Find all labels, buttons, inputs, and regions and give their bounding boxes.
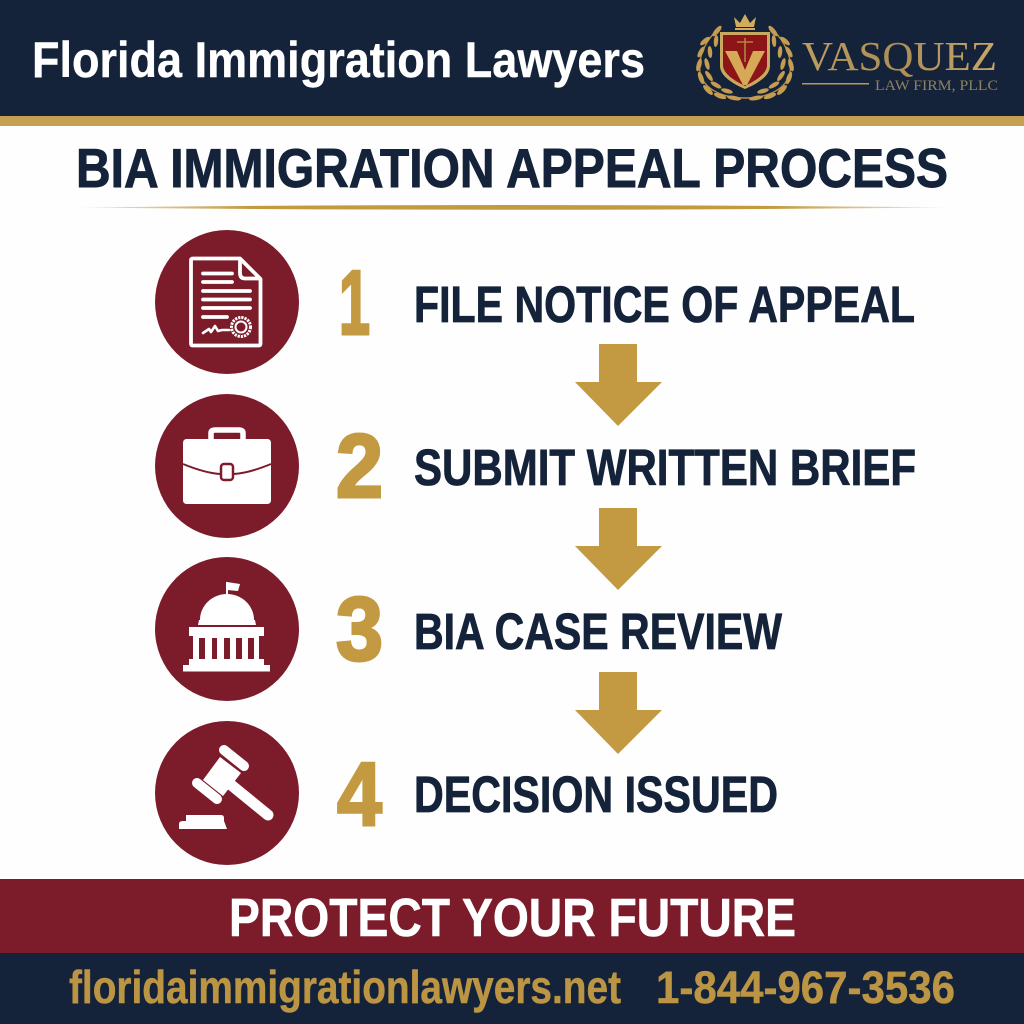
logo subline: LAW FIRM, PLLC [875, 78, 998, 94]
header title: Florida Immigration Lawyers [32, 32, 645, 88]
number 2: 2 [336, 417, 383, 517]
step 4 [155, 721, 778, 865]
step 1 label: FILE NOTICE OF APPEAL [414, 276, 915, 333]
logo shield [720, 32, 770, 89]
contact footer [0, 953, 1024, 1024]
step 3 label: BIA CASE REVIEW [414, 603, 783, 660]
step 2 label: SUBMIT WRITTEN BRIEF [414, 439, 916, 496]
arrow 1 [575, 344, 662, 426]
header band [0, 0, 1024, 126]
number 1: 1 [339, 253, 370, 354]
logo laurel wreath [695, 24, 795, 101]
icon: document [155, 230, 299, 374]
call to action band [0, 879, 1024, 953]
number 3: 3 [336, 580, 383, 680]
phone number: 1-844-967-3536 [656, 962, 955, 1013]
icon: gavel [155, 721, 299, 865]
step 4 label: DECISION ISSUED [414, 766, 778, 823]
icon: briefcase [155, 394, 299, 538]
law firm logo [695, 14, 998, 101]
call to action text: PROTECT YOUR FUTURE [229, 888, 796, 948]
step 1 [155, 230, 915, 374]
step 3 [155, 557, 783, 701]
arrow 2 [575, 508, 662, 590]
arrow 3 [575, 672, 662, 754]
step 2 [155, 394, 916, 538]
icon: courthouse [155, 557, 299, 701]
number 4: 4 [337, 745, 382, 845]
title underline [78, 205, 946, 210]
logo wordmark: VASQUEZ [802, 33, 997, 79]
logo crown [734, 14, 756, 30]
website: floridaimmigrationlawyers.net [69, 961, 621, 1013]
